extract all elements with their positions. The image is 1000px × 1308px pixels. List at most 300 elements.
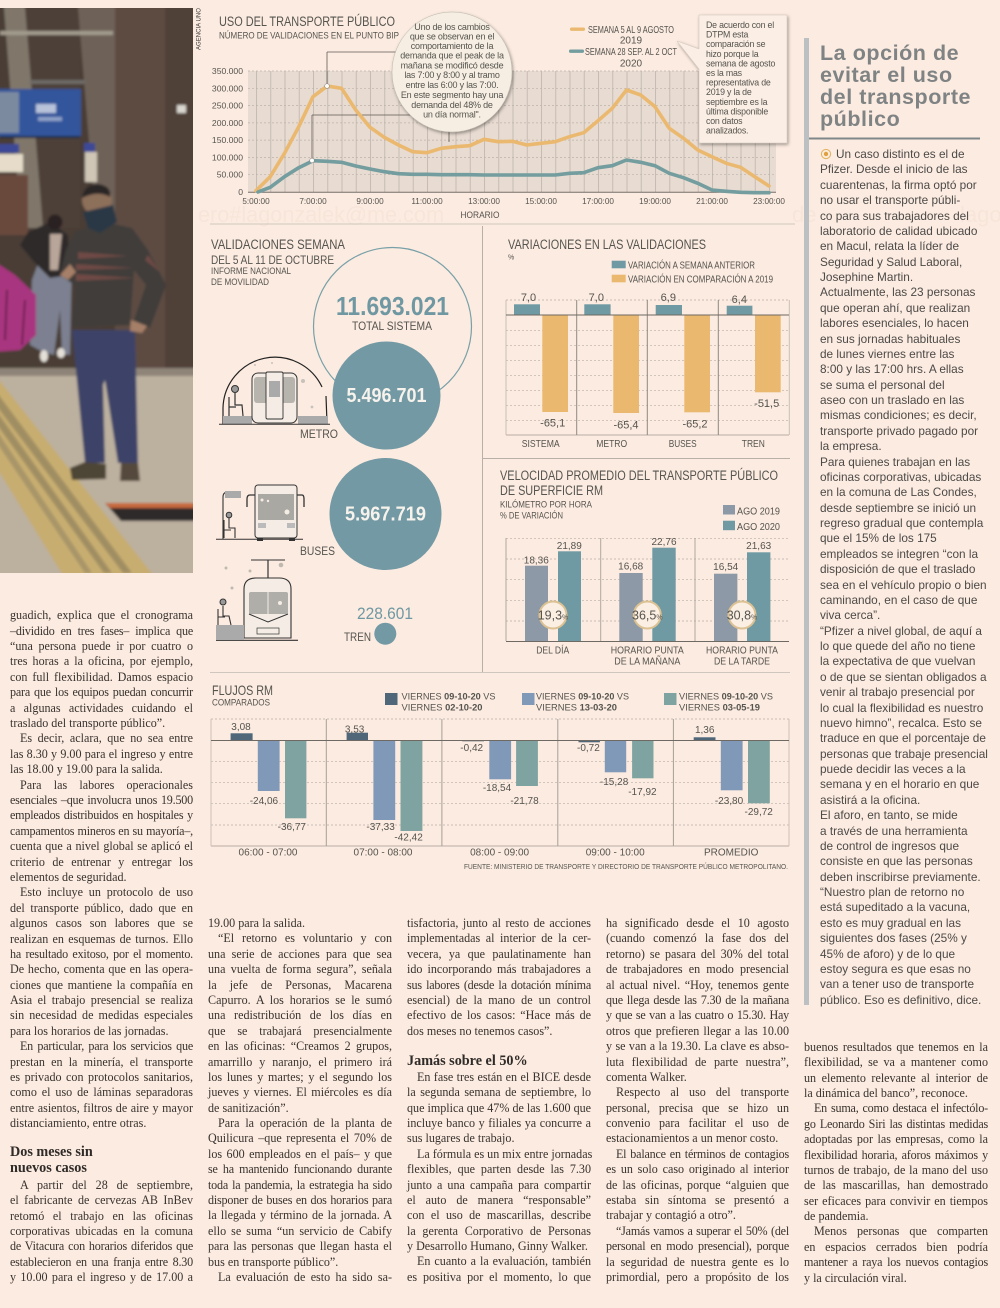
total system circle: 11.693.021 bbox=[336, 291, 449, 321]
x axis labels: 5:00:00 bbox=[242, 197, 270, 206]
callout: DTPM note box: De acuerdo con el bbox=[706, 20, 774, 30]
chart: flows bars: 06:00 - 07:00 bbox=[239, 848, 298, 858]
article column 1: esenciales –que involucra unos 19.500 bbox=[10, 793, 193, 807]
article column 4: es un solo caso originado al interior bbox=[606, 1162, 789, 1176]
watermark: ero#lagonzalek@me.com bbox=[198, 202, 444, 227]
heading: weekly validations: DEL 5 AL 11 DE OCTUBRE bbox=[211, 255, 334, 267]
variation badges: 36,5% bbox=[632, 608, 663, 622]
callout: circle about peak change: las 7:00 y 8:00 y al tramo bbox=[404, 70, 500, 80]
article column 5: en espacios cerrados bien podría bbox=[804, 1240, 988, 1254]
heading: variations bbox=[508, 237, 706, 262]
article column 1: –dividido en tres fases– implica que bbox=[10, 624, 193, 638]
article column 1: sin necesidad de medidas especiales bbox=[10, 1008, 193, 1022]
article column 1: entre asientos, filtros de aire y mayor bbox=[10, 1101, 193, 1115]
article column 3 continuation: En fase tres están en el BICE desde bbox=[417, 1070, 591, 1084]
y axis labels: 100.000 bbox=[212, 152, 243, 162]
article column 4: de las oficinas, porque “alguien que bbox=[606, 1178, 789, 1192]
sidebar article text: regreso gradual que contempla bbox=[820, 516, 983, 530]
article column 4 bbox=[606, 916, 790, 1284]
icon: bus at stop bbox=[216, 485, 304, 541]
article column 2 bbox=[208, 916, 392, 1284]
article column 5: Menos personas que comparten bbox=[814, 1224, 988, 1238]
article column 1: cuenta que a nivel global se aplicó el bbox=[10, 839, 193, 853]
sidebar article text: personas que trabaje presencial bbox=[820, 747, 988, 761]
source note: FUENTE: MINISTERIO DE TRANSPORTE Y DIRECTORIO DE TRANSPORTE PÚBLICO METROPOLITANO. bbox=[464, 862, 788, 871]
article column 3: dos meses no tenemos casos”. bbox=[407, 1024, 552, 1038]
callout: circle about peak change: comportamiento de la bbox=[411, 41, 493, 51]
sidebar article text: cuarentenas, la firma optó por bbox=[820, 178, 977, 192]
sidebar article text: lo cual la flexibilidad es nuestro bbox=[820, 700, 983, 714]
sidebar article text: la empresa. bbox=[820, 439, 882, 453]
sidebar article text: Actualmente, las 23 personas bbox=[820, 285, 975, 299]
sidebar heading: La opción de bbox=[820, 41, 959, 65]
article column 1: distanciamiento, entre otras. bbox=[10, 1116, 146, 1130]
article column 2: “El retorno es voluntario y con bbox=[218, 931, 392, 945]
heading: weekly validations bbox=[211, 237, 345, 287]
buses label: BUSES bbox=[300, 546, 335, 558]
heading: average speed: VELOCIDAD PROMEDIO DEL TRANSPORTE PÚBLICO bbox=[500, 468, 778, 483]
article column 1 bbox=[10, 608, 194, 1130]
buses bubble: 5.967.719 bbox=[345, 504, 426, 526]
x axis labels bbox=[242, 197, 785, 206]
article column 1 continuation: el fabricante de cervezas AB InBev bbox=[10, 1193, 193, 1207]
article column 5: de pandemia. bbox=[804, 1209, 868, 1223]
article column 2: bus en transporte público”. bbox=[208, 1255, 338, 1269]
sidebar article text: caminando, en el caso de que bbox=[820, 593, 977, 607]
photo: commuter on metro platform bbox=[0, 0, 205, 585]
chart: speed bars: DEL DÍA bbox=[536, 644, 569, 656]
y axis labels: 0 bbox=[238, 187, 243, 197]
chart: variation bars: 6,4 bbox=[732, 294, 747, 306]
article column 3: vecera, ya que paulatinamente han bbox=[407, 947, 591, 961]
article column 1: Es decir, aclara, que no sea entre bbox=[20, 731, 193, 745]
article column 1: para que los equipos puedan concurrir bbox=[10, 685, 193, 699]
chart: flows bars: -23,80 bbox=[715, 796, 744, 807]
sidebar article text: la expectativa de que vuelvan bbox=[820, 654, 975, 668]
article column 1 continuation: establecieron en una franja entre 8.30 bbox=[10, 1255, 193, 1269]
heading: average speed bbox=[500, 468, 778, 520]
chart: variation bars bbox=[506, 292, 789, 450]
article column 3 continuation bbox=[406, 1070, 592, 1284]
heading: line chart title: USO DEL TRANSPORTE PÚBLICO bbox=[219, 14, 395, 29]
article column 4: al actual nivel. “Hoy, tenemos gente bbox=[606, 978, 789, 992]
article column 3 continuation: En cuanto a la evaluación, también bbox=[417, 1254, 591, 1268]
article column 1: ha resultado exitoso, por el momento. bbox=[10, 947, 193, 961]
sidebar article text: deben inscribirse previamente. bbox=[820, 870, 981, 884]
sidebar article text: van a tener uso de transporte bbox=[820, 977, 974, 991]
legend: average speed: AGO 2019 bbox=[737, 506, 780, 518]
article column 5: de las mascarillas, han demostrado bbox=[804, 1178, 988, 1192]
chart: variation bars: METRO bbox=[596, 438, 627, 450]
chart: flows bars: 3,08 bbox=[231, 722, 251, 733]
y axis labels: 200.000 bbox=[212, 118, 243, 128]
subheading: Dos meses sin nuevos casos bbox=[10, 1144, 93, 1176]
photo credit: AGENCIA UNO bbox=[196, 8, 202, 50]
tren value and bubble: TREN bbox=[344, 632, 371, 644]
article column 5: go Leonardo Siri las distintas medidas bbox=[804, 1117, 988, 1131]
sidebar article text: transporte privado pagado por bbox=[820, 424, 978, 438]
legend: flows bbox=[385, 692, 773, 714]
legend: flows: VIERNES 02-10-20 bbox=[402, 702, 482, 714]
article column 3 continuation: la segunda semana de septiembre, lo bbox=[407, 1085, 591, 1099]
x axis labels: 9:00:00 bbox=[356, 197, 384, 206]
article column 2: de sanitización”. bbox=[208, 1101, 289, 1115]
sidebar article text: o de que se sientan obligados a bbox=[820, 670, 987, 684]
icon: metro train at station bbox=[219, 357, 330, 424]
chart: variation bars: SISTEMA bbox=[522, 438, 560, 450]
article column 3 continuation: es positiva por el momento, lo que bbox=[407, 1270, 591, 1284]
article column 5: mantener a raya los nuevos contagios bbox=[804, 1255, 988, 1269]
sidebar article text: “Pfizer a nivel global, de aquí a bbox=[820, 624, 982, 638]
article column 3: tisfactoria, junto al resto de acciones bbox=[407, 916, 591, 930]
heading: average speed: KILÓMETRO POR HORA bbox=[500, 500, 592, 510]
article column 2: ello se suma “un servicio de Cabify bbox=[208, 1224, 392, 1238]
article column 2: la llegada y término de la jornada. A bbox=[208, 1208, 392, 1222]
sidebar article text: 45% de aforo) y de lo que bbox=[820, 946, 955, 960]
article column 3 continuation: La fórmula es un mix entre jornadas bbox=[417, 1147, 592, 1161]
x axis labels: 17:00:00 bbox=[582, 197, 614, 206]
article column 2: se ha mantenido funcionando durante bbox=[208, 1162, 392, 1176]
x axis labels: 21:00:00 bbox=[696, 197, 728, 206]
article column 2: disponer de buses en dos horarios para bbox=[208, 1193, 392, 1207]
chart: speed bars: DE LA TARDE bbox=[714, 656, 770, 668]
sidebar article text: sea en el vehículo propio o bien bbox=[820, 578, 987, 592]
legend: SEMANA 28 SEP. AL 2 OCT bbox=[585, 46, 677, 58]
sidebar heading rule bbox=[809, 138, 980, 140]
article column 1: elementos de seguridad. bbox=[10, 870, 127, 884]
chart: speed bars: 16,68 bbox=[618, 562, 644, 572]
heading: flows: COMPARADOS bbox=[212, 698, 270, 708]
callout: DTPM note box: es la mas bbox=[706, 68, 743, 78]
chart: variation bars: 7,0 bbox=[589, 292, 604, 304]
article column 3 continuation: el auto de manera “responsable” bbox=[407, 1193, 591, 1207]
article column 2: para las personas que llegan hasta el bbox=[208, 1239, 392, 1253]
article column 4: de trabajadores en modo presencial bbox=[606, 962, 789, 976]
sidebar article text: mismas condiciones; es decir, bbox=[820, 408, 977, 422]
metro bubble: 5.496.701 bbox=[346, 385, 426, 407]
sidebar article text: viva cerca”. bbox=[820, 608, 880, 622]
sidebar article text: co para sus trabajadores del bbox=[820, 208, 969, 222]
chart: flows bars: 09:00 - 10:00 bbox=[586, 848, 645, 858]
y axis labels: 50.000 bbox=[217, 170, 243, 180]
article column 4: y que se van a las cuatro o 15.30. Hay bbox=[606, 1008, 789, 1022]
callout: circle about peak change: mañana se modificó desde bbox=[401, 60, 504, 70]
subheading: Dos meses sin nuevos casos: Dos meses sin bbox=[10, 1144, 93, 1160]
article column 2: Capurro. A los horarios se le sumó bbox=[208, 993, 392, 1007]
article column 4: convenio para facilitar el uso de bbox=[606, 1116, 789, 1130]
chart: flows bars: -36,77 bbox=[278, 822, 306, 833]
chart: flows bars: -18,54 bbox=[483, 783, 512, 794]
article column 4: otros que prefieren llegar a las 10.00 bbox=[606, 1024, 789, 1038]
legend: 2020 bbox=[620, 58, 643, 70]
sidebar heading: evitar el uso bbox=[820, 63, 953, 87]
chart: flows bars bbox=[211, 719, 789, 858]
chart: variation bars: -65,2 bbox=[682, 418, 708, 430]
article column 2: jueves y viernes. El miércoles es día bbox=[208, 1085, 392, 1099]
article column 4: que llega desde las 7.30 de la mañana bbox=[606, 993, 789, 1007]
sidebar article text: Seguridad y Salud Laboral, bbox=[820, 255, 962, 269]
chart: flows bars: PROMEDIO bbox=[704, 848, 759, 858]
sidebar article text: en la comuna de Las Condes, bbox=[820, 485, 977, 499]
sidebar article text: Josephine Martin. bbox=[820, 270, 913, 284]
legend: average speed bbox=[723, 505, 780, 533]
panel: validations variation bar chart bbox=[506, 237, 789, 450]
article column 2: amarrillo y naranjo, el primero irá bbox=[208, 1055, 392, 1069]
article column 3: esencial) de la mano de un control bbox=[407, 993, 591, 1007]
article column 1: para los horarios de las jornadas. bbox=[10, 1024, 169, 1038]
chart: variation bars: TREN bbox=[742, 438, 765, 450]
article column 1: con full flexibilidad. Damos espacio bbox=[10, 670, 193, 684]
article column 4: retorno) se pasara del 30% del total bbox=[606, 947, 789, 961]
total system circle bbox=[314, 248, 472, 406]
legend: flows: VIERNES 09-10-20 VS bbox=[679, 692, 773, 702]
article column 4: estaba sin síntoma se presentó a bbox=[606, 1193, 789, 1207]
chart: flows bars: -24,06 bbox=[250, 796, 279, 807]
chart: speed bars: HORARIO PUNTA bbox=[706, 644, 778, 656]
sidebar vertical bar bbox=[804, 38, 809, 1005]
article column 5: ser eficaces para convivir en tiempos bbox=[804, 1194, 988, 1208]
heading: weekly validations: VALIDACIONES SEMANA bbox=[211, 237, 345, 252]
sidebar article text: oficinas corporativas, ubicadas bbox=[820, 470, 981, 484]
article column 5: adoptadas por las empresas, como la bbox=[804, 1132, 988, 1146]
article column 1: Asia el trabajo presencial se realiza bbox=[10, 993, 193, 1007]
chart: variation bars: BUSES bbox=[669, 438, 697, 450]
article column 5 bbox=[804, 1040, 988, 1285]
article column 4: “Jamás vamos a superar el 50% (del bbox=[616, 1224, 789, 1238]
article column 4: ha significado desde el 10 agosto bbox=[606, 916, 789, 930]
article column 3 continuation: sus lugares de trabajo. bbox=[407, 1131, 514, 1145]
article column 5: En suma, como destaca el infectólo- bbox=[814, 1101, 988, 1115]
sidebar article text: Pfizer. Desde el inicio de las bbox=[820, 162, 968, 176]
chart: speed bars: 16,54 bbox=[713, 562, 739, 573]
callout: circle about peak change: Uno de los cambios bbox=[414, 22, 490, 32]
buses bubble bbox=[330, 458, 442, 570]
article column 1: campamentos mineros en su mayoría–, bbox=[10, 824, 193, 838]
sidebar article text: Para quienes trabajan en las bbox=[820, 454, 970, 468]
chart: flows bars: -21,78 bbox=[510, 796, 539, 807]
sidebar article text: lo que quede del año no tiene bbox=[820, 639, 975, 653]
sidebar article text: de lunes viernes entre las bbox=[820, 347, 954, 361]
article column 1 continuation: A partir del 28 de septiembre, bbox=[20, 1178, 193, 1192]
variation badges: 30,8% bbox=[727, 608, 757, 622]
sidebar article text: consiste en que las personas bbox=[820, 854, 973, 868]
article column 3: efectivo de los casos: “Hace más de bbox=[407, 1008, 591, 1022]
sidebar article text: no usar el transporte públi- bbox=[820, 193, 960, 207]
callout: DTPM note box: con datos bbox=[706, 116, 743, 126]
legend: average speed: AGO 2020 bbox=[737, 522, 780, 533]
callout: DTPM note box: septiembre es la bbox=[706, 97, 768, 107]
sidebar article text: siguientes dos fases (25% y bbox=[820, 931, 967, 945]
callout: circle about peak change: entre las 6:00 y las 7:00. bbox=[406, 80, 498, 90]
icon: sidebar bullet bbox=[821, 149, 831, 159]
article column 1: traslado del transporte público”. bbox=[10, 716, 165, 730]
article column 3 continuation: incluye banco y filiales ya concurre a bbox=[407, 1116, 591, 1130]
article column 3 continuation: la gerenta Corporativo de Personas bbox=[407, 1224, 591, 1238]
sidebar article text: empleados se integren “con la bbox=[820, 547, 978, 561]
sidebar article text: El aforo, en tanto, se mide bbox=[820, 808, 958, 822]
article column 3 continuation: con el uso de mascarillas, describe bbox=[407, 1208, 591, 1222]
x axis labels: 13:00:00 bbox=[468, 197, 500, 206]
chart: flows bars: 08:00 - 09:00 bbox=[470, 848, 530, 858]
article column 2: 19.00 para la salida. bbox=[208, 916, 305, 930]
article column 4: El balance en términos de contagios bbox=[616, 1147, 789, 1161]
heading: line chart title bbox=[219, 14, 399, 42]
article column 1: las 8.30 y 9.00 para el ingreso y entre bbox=[10, 747, 193, 761]
article column 1: Esto incluye un protocolo de uso bbox=[20, 885, 193, 899]
chart: flows bars: 07:00 - 08:00 bbox=[354, 848, 413, 858]
y axis labels: 350.000 bbox=[212, 66, 243, 76]
article column 1 continuation: y 10.00 para el ingreso y de 17.00 a bbox=[10, 1270, 193, 1284]
article column 2: una serie de acciones para que sea bbox=[208, 947, 392, 961]
article column 1 continuation bbox=[10, 1178, 194, 1284]
article column 2: Quilicura –que representa el 70% de bbox=[208, 1131, 392, 1145]
chart: flows bars: -0,72 bbox=[577, 743, 600, 754]
article column 2: Para la operación de la planta de bbox=[218, 1116, 392, 1130]
tren value and bubble bbox=[344, 604, 413, 645]
callout: circle about peak change bbox=[392, 12, 512, 132]
legend: flows: VIERNES 09-10-20 VS bbox=[402, 692, 496, 702]
chart: speed bars bbox=[506, 537, 789, 668]
panel: weekly validations by mode bbox=[211, 237, 472, 645]
article column 4: personal en modo presencial), porque bbox=[606, 1239, 789, 1253]
heading: weekly validations: DE MOVILIDAD bbox=[211, 277, 269, 287]
sidebar article text: puede decidir las veces a la bbox=[820, 762, 966, 776]
line: week 28 Sep - 2 Oct 2020 bbox=[258, 160, 769, 193]
legend: variations bbox=[612, 258, 773, 286]
peak markers bbox=[310, 84, 329, 163]
tren value and bubble: 228.601 bbox=[357, 604, 413, 623]
article column 3 continuation: flexibles, que parten desde las 7.30 bbox=[407, 1162, 591, 1176]
panel: RM flows comparison chart bbox=[211, 682, 789, 871]
sidebar article text: esto es muy gradual en las bbox=[820, 916, 961, 930]
subheading: Jamás sobre el 50%: Jamás sobre el 50% bbox=[407, 1053, 528, 1069]
legend: variations: VARIACIÓN EN COMPARACIÓN A 2019 bbox=[628, 272, 773, 286]
sidebar article text: semana y en el horario en que bbox=[820, 777, 979, 791]
callout: circle about peak change: En este segmento hay una bbox=[401, 90, 503, 100]
chart plot area bbox=[248, 52, 776, 192]
article column 3 continuation: junto a una campaña para compartir bbox=[407, 1178, 591, 1192]
chart: variation bars: -65,4 bbox=[613, 420, 639, 432]
article column 1: las 18.00 y 19.00 para la salida. bbox=[10, 762, 163, 776]
sidebar article text: estoy segura es que esas no bbox=[820, 962, 971, 976]
article column 4: personal, precisa que se hizo un bbox=[606, 1101, 789, 1115]
article column 3: ido incorporando más trabajadores a bbox=[407, 962, 591, 976]
chart: variation bars: -51,5 bbox=[754, 398, 779, 410]
article column 1: En particular, para los servicios que bbox=[20, 1039, 193, 1053]
legend: flows: VIERNES 13-03-20 bbox=[536, 702, 617, 714]
legend: flows: VIERNES 03-05-19 bbox=[679, 702, 760, 714]
article column 2: una vuelta de forma segura”, señala bbox=[208, 962, 392, 976]
chart: speed bars: 21,89 bbox=[557, 541, 582, 552]
sidebar article text: aseo con un traslado en las bbox=[820, 393, 964, 407]
total system circle: TOTAL SISTEMA bbox=[352, 321, 432, 333]
chart: flows bars: -15,28 bbox=[600, 777, 629, 788]
legend: variations: VARIACIÓN A SEMANA ANTERIOR bbox=[628, 258, 755, 272]
chart: flows bars: -29,72 bbox=[745, 807, 773, 818]
article column 4: y se van a la 19.30. La clave es abso- bbox=[606, 1039, 789, 1053]
sidebar heading: público bbox=[820, 107, 900, 131]
chart: variation bars: 6,9 bbox=[661, 292, 676, 304]
heading: weekly validations: INFORME NACIONAL bbox=[211, 266, 291, 276]
sidebar article text: 8:00 y las 17:00 hrs. A ellas bbox=[820, 362, 964, 376]
chart: flows bars: 1,36 bbox=[695, 725, 715, 736]
article column 2: toda la pandemia, la estrategia ha sido bbox=[208, 1178, 392, 1192]
variation badges: 19,3% bbox=[538, 608, 568, 622]
callout: DTPM note box: hizo porque la bbox=[706, 49, 759, 59]
panel: line chart of public transport use bbox=[212, 12, 787, 221]
chart: flows bars: -0,42 bbox=[460, 743, 484, 754]
heading: line chart title: NÚMERO DE VALIDACIONES EN EL PUNTO BIP bbox=[219, 30, 399, 42]
article column 1: criterio de entrenar y entregar los bbox=[10, 855, 193, 869]
chart: speed bars: 22,76 bbox=[651, 537, 677, 548]
article column 2: que se trabajará presencialmente bbox=[208, 1024, 392, 1038]
callout: circle about peak change: que se observan en el bbox=[410, 32, 494, 42]
panel: average speed bar chart bbox=[500, 468, 789, 668]
chart: flows bars: -37,33 bbox=[366, 822, 395, 833]
y axis labels: 150.000 bbox=[212, 135, 243, 145]
y axis labels: 250.000 bbox=[212, 101, 243, 111]
metro bubble bbox=[332, 342, 440, 450]
article column 1: ciones que mantiene la compañía en bbox=[10, 978, 193, 992]
sidebar article text: “Nuestro plan de retorno no bbox=[820, 885, 964, 899]
sidebar article text: de control de ingresos que bbox=[820, 839, 959, 853]
article column 1 continuation: retomó el trabajo en las oficinas bbox=[10, 1209, 193, 1223]
legend: SEMANA 5 AL 9 AGOSTO bbox=[588, 24, 674, 36]
sidebar article text: venir al trabajo presencial por bbox=[820, 685, 975, 699]
sidebar article text: a través de una herramienta bbox=[820, 824, 968, 838]
sidebar article text: está supeditado a la vacuna, bbox=[820, 900, 970, 914]
callout: DTPM note box: representativa de bbox=[706, 78, 771, 88]
article column 5: y la circulación viral. bbox=[804, 1271, 907, 1285]
subheading: Dos meses sin nuevos casos: nuevos casos bbox=[10, 1160, 87, 1176]
heading: flows bbox=[212, 682, 273, 708]
chart: flows bars: -42,42 bbox=[394, 832, 423, 844]
article column 4: primordial, pero a propósito de los bbox=[606, 1270, 789, 1284]
article column 1 continuation: de Vitacura con horarios diferidos que bbox=[10, 1239, 193, 1253]
article column 5: un elemento relevante al interior de bbox=[804, 1071, 988, 1085]
callout: circle about peak change: un día normal". bbox=[423, 110, 481, 120]
article column 1: tres horas a la oficina, por ejemplo, bbox=[10, 654, 193, 668]
article column 1: prestan en la minería, el transporte bbox=[10, 1055, 193, 1069]
article column 1: a algunas actividades cuidando el bbox=[10, 701, 193, 715]
x axis title: HORARIO bbox=[460, 210, 500, 221]
sidebar article text: que el 15% de los 175 bbox=[820, 531, 937, 545]
sidebar article text: en sus jornadas habituales bbox=[820, 332, 960, 346]
legend: 2019 bbox=[620, 36, 643, 46]
sidebar article text: se suma el personal del bbox=[820, 378, 945, 392]
callout: DTPM note box: 2019 y la de bbox=[706, 87, 752, 97]
legend: flows: VIERNES 09-10-20 VS bbox=[536, 692, 629, 702]
y axis labels bbox=[212, 66, 243, 197]
chart: flows bars: -17,92 bbox=[628, 787, 657, 798]
chart: speed bars: DE LA MAÑANA bbox=[614, 654, 680, 668]
article column 4: la seguridad de nuestra gente es lo bbox=[606, 1255, 789, 1269]
article column 1: es privado con protocolos sanitarios, bbox=[10, 1070, 193, 1084]
heading: variations: % bbox=[508, 254, 514, 262]
chart: variation bars: -65,1 bbox=[540, 418, 565, 430]
sidebar article text: disposición de que el traslado bbox=[820, 562, 975, 576]
sidebar article text: que operan ahí, que realizan bbox=[820, 301, 970, 315]
article column 4: (cuando comenzó la fase dos del bbox=[606, 931, 789, 945]
article column 2: una redistribución de los días en bbox=[208, 1008, 392, 1022]
article column 1: Para las labores operacionales bbox=[20, 778, 193, 792]
callout: DTPM note box bbox=[677, 15, 787, 143]
article column 1 continuation: corporativas ubicadas en la comuna bbox=[10, 1224, 193, 1238]
watermark bbox=[198, 202, 1000, 227]
sidebar article text: desde septiembre se inició un bbox=[820, 501, 976, 515]
heading: average speed: % DE VARIACIÓN bbox=[500, 510, 563, 520]
article column 1: algunos casos son labores que se bbox=[10, 916, 193, 930]
